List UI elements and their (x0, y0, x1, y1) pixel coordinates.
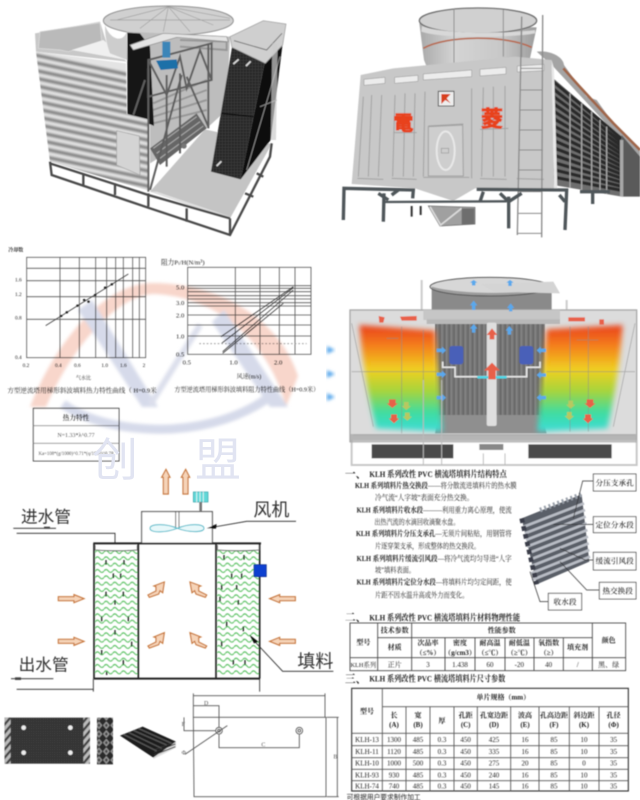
data row: -20 (515, 661, 524, 669)
data rows: 85 (551, 771, 558, 779)
data line (46, 274, 128, 326)
data rows: 485 (413, 748, 424, 756)
fill frame lines (352, 323, 635, 435)
brand character 電: 電 (393, 113, 413, 135)
data rows: 0.3 (438, 748, 447, 756)
data rows: 85 (551, 748, 558, 756)
y axis labels: 0.5 (176, 351, 185, 358)
data rows: 35 (610, 771, 618, 779)
data rows: 425 (489, 736, 500, 744)
y axis labels: 3.0 (176, 300, 185, 307)
header cells: 孔径 (607, 711, 622, 720)
table: thermal characteristics: 热力特性 (63, 413, 90, 422)
brand character 菱: 菱 (481, 107, 503, 132)
data rows: 0.3 (438, 771, 447, 779)
dimension letters (182, 701, 337, 760)
label: 缓流引风段: 缓流引风段 (596, 556, 634, 566)
data rows: 16 (522, 736, 529, 744)
label: 进水管: 进水管 (21, 508, 71, 527)
data rows: 450 (460, 771, 471, 779)
label: 出水管: 出水管 (19, 656, 69, 675)
section three heading (345, 673, 506, 685)
orange air arrows (58, 469, 295, 648)
dimension letters: B (333, 754, 337, 760)
y axis labels: 5.0 (176, 285, 185, 292)
x axis labels (183, 359, 283, 366)
x axis labels: 1.6 (120, 363, 127, 369)
header cells: 氧指数 (538, 638, 559, 647)
data rows: 16 (522, 748, 529, 756)
data rows: 500 (413, 760, 424, 768)
data row: 3 (426, 661, 430, 669)
back stacks (537, 51, 640, 160)
photo: fill sheet front (5, 718, 90, 764)
chart: resistance characteristic curve (161, 257, 319, 394)
feature list: 坡”填料表面。 (375, 565, 415, 575)
data rows: 485 (413, 736, 424, 744)
ladder (517, 15, 543, 237)
data rows: 10 (581, 748, 588, 756)
data rows: 450 (460, 736, 471, 744)
data rows: 450 (460, 748, 471, 756)
label: 出水管 (11, 656, 93, 689)
feature list: KLH 系列填料片定位分水段—将填料片均匀定间距，使 (357, 577, 512, 588)
data rows: 450 (460, 760, 471, 768)
data rows: 1300 (387, 736, 401, 744)
dimension letters: F (182, 722, 186, 728)
feature list: 出热汽流的水滴回收滴聚水盘。 (374, 516, 459, 526)
caption: 方型逆流塔用梯形斜波填料热力特性曲线（ H=0.9米 (7, 385, 157, 394)
label: 缓流引风段 (593, 552, 636, 570)
data rows: 485 (413, 771, 424, 779)
y axis labels: 1.0 (176, 334, 185, 341)
watermark: logo arcs (30, 283, 298, 429)
dimension drawing (182, 693, 339, 797)
feature list: 片距不因水温升高或外力而变化。 (375, 590, 468, 600)
data rows: KLH-11 (355, 748, 379, 756)
corrugated side wall (36, 52, 148, 190)
feature list: KLH 系列填料片缓流引风段—将冷气流均匀导进“人字 (357, 553, 512, 563)
data rows: 335 (489, 748, 500, 756)
water tanks and piping (443, 346, 540, 377)
front wall (352, 57, 557, 201)
header cells: （≥） (540, 649, 558, 657)
axis title: 冷却数 (8, 247, 23, 254)
data rows: 20 (522, 760, 529, 768)
hot to cold fill right (537, 325, 623, 432)
data row: KLH系列 (350, 660, 376, 669)
header cells: 次品率 (418, 638, 439, 647)
blue flow pointers (327, 346, 335, 401)
chart: thermal characteristic curve (7, 247, 157, 394)
header cells: （≤℃） (478, 649, 502, 657)
door panel (428, 125, 463, 176)
header cells: 长 (390, 711, 397, 720)
caption: 方型逆流塔用梯形斜波填料阻力特性曲线（H=0.9米） (174, 385, 319, 394)
tower housing (350, 277, 637, 465)
left fill block (95, 551, 138, 676)
roof and plenum (35, 22, 127, 62)
data rows: 85 (551, 783, 558, 791)
data rows: KLH-13 (355, 736, 379, 744)
label: 分压支承孔: 分压支承孔 (596, 477, 634, 487)
header cells: 颜色 (602, 635, 616, 644)
data row: 40 (545, 661, 553, 669)
data row: 正片 (388, 660, 402, 669)
central chamber (435, 320, 545, 420)
label: 定位分水段: 定位分水段 (596, 519, 634, 529)
data rows: 35 (610, 748, 618, 756)
photo: fill pack (120, 727, 176, 759)
hot to cold fill left (359, 325, 443, 432)
access door (117, 131, 140, 175)
section three heading: 三、 (345, 673, 366, 685)
header cells: 宽 (414, 711, 421, 720)
blue control box (254, 565, 266, 577)
data rows: 35 (610, 736, 618, 744)
header cells: 耐低温 (509, 638, 530, 647)
table: thermal characteristics (33, 408, 119, 461)
basin (350, 380, 637, 465)
base frame (50, 143, 272, 235)
header cells: 波高 (518, 711, 532, 720)
y axis labels (15, 278, 22, 361)
data rows: 16 (522, 783, 529, 791)
axis title: 阻力P₍/H(N/m³) (161, 257, 205, 266)
heading (345, 469, 507, 481)
data rows: 240 (489, 771, 500, 779)
y axis labels: 0.8 (15, 315, 22, 321)
data rows: 35 (610, 783, 618, 791)
data row (350, 660, 619, 669)
feature list (355, 480, 517, 600)
plot grid (27, 257, 146, 358)
header cells: (C) (461, 721, 471, 729)
header cells: (F) (550, 721, 559, 729)
image: crossflow cooling tower (343, 8, 640, 237)
header cells: (E) (520, 721, 530, 729)
data rows: 0.3 (438, 760, 447, 768)
resistance lines (221, 287, 293, 353)
y axis labels: 1.2 (15, 292, 22, 298)
header cells: (D) (489, 721, 500, 729)
data rows: 0 (582, 760, 586, 768)
data rows: 85 (551, 736, 558, 744)
x axis labels: 2 (143, 363, 146, 369)
label: 进水管 (13, 508, 115, 543)
sheet outline (193, 717, 326, 797)
dotted reference row (199, 342, 307, 345)
data rows: 740 (389, 783, 400, 791)
data rows: KLH-10 (355, 760, 379, 768)
section one: structure features (345, 469, 636, 624)
dimension letters: C (261, 743, 265, 749)
top right housing (230, 21, 286, 63)
watermark: character 盟: 盟 (195, 434, 241, 486)
fan ring top (103, 6, 233, 35)
y axis labels: 0.4 (15, 355, 22, 361)
header cells: 技术参数 (381, 625, 409, 634)
header cells: 耐高温 (480, 638, 500, 647)
x axis labels: 2.0 (274, 359, 283, 366)
header cells: 材质 (388, 643, 402, 652)
section two heading (345, 612, 521, 624)
x axis labels: 0.5 (183, 359, 192, 366)
data row: 黑、绿 (598, 660, 619, 669)
table: material physical properties (345, 623, 626, 685)
header cells: 厚 (438, 716, 445, 725)
central pipe (487, 323, 497, 426)
x axis title: 风速(m/s) (237, 372, 261, 380)
data row: / (577, 661, 579, 669)
section three heading: KLH 系列改性 PVC 横流塔填料片尺寸参数 (369, 674, 506, 684)
x axis labels: 0.2 (23, 363, 30, 369)
header cells: （≤%） (416, 649, 440, 657)
black fill packs (211, 43, 283, 179)
feature list: KLH 系列填料片收水段———利用重力离心原理，使流 (357, 505, 512, 516)
x axis labels: 0.4 (55, 363, 62, 369)
data rows: 930 (389, 771, 400, 779)
data rows: 145 (489, 783, 500, 791)
header cells: 孔宽边距 (480, 711, 508, 720)
x axis labels: 1.0 (229, 359, 238, 366)
table: thermal characteristics: N=1.33*λ^0.77 (57, 433, 95, 439)
hopper (428, 206, 475, 226)
data rows: 275 (489, 760, 500, 768)
feature list: 片逐穿架支承，形成整体的热交换段。 (375, 540, 480, 551)
x axis title: 气水比 (76, 375, 91, 382)
leader lines (530, 481, 599, 602)
feature list: 冷气流“人字坡”表面充分热交换。 (375, 492, 473, 502)
diagram: crossflow tower schematic (11, 469, 333, 692)
header cells: (K) (579, 721, 590, 729)
y axis labels (176, 285, 185, 358)
data rows (355, 736, 618, 791)
plot grid (188, 267, 311, 354)
data rows: 1120 (387, 748, 401, 756)
header cells (360, 693, 622, 729)
fan stack (419, 8, 537, 67)
side louvers (552, 77, 623, 198)
feature list: KLH 系列填料片热交换段——将分散流进填料片的热水膜 (355, 480, 517, 490)
data rows: KLH-93 (355, 771, 379, 779)
label: 分压支承孔 (593, 474, 636, 491)
section two heading: 二、 (345, 612, 366, 624)
label: 收水段 (548, 593, 582, 610)
data rows: 10 (581, 771, 588, 779)
interior rack (150, 113, 207, 165)
dark opening (127, 33, 154, 126)
bolt holes (216, 727, 303, 734)
dimension letters: D (204, 701, 209, 707)
dimension letters: Φ (182, 750, 187, 756)
label: 填料: 填料 (297, 651, 333, 671)
tower outline (93, 543, 261, 692)
watermark: character 创: 创 (92, 434, 138, 486)
y axis labels: 1.6 (15, 278, 22, 284)
x axis labels: 0.6 (74, 363, 81, 369)
data rows: 10 (581, 736, 588, 744)
label: 风机: 风机 (253, 500, 289, 520)
label: 热交换段: 热交换段 (602, 585, 633, 595)
section two heading: KLH 系列改性 PVC 横流塔填料片材料物理性能 (369, 612, 521, 622)
data rows: 35 (610, 760, 618, 768)
header cells: （≥℃） (507, 649, 532, 657)
right fill block (217, 551, 259, 676)
dimension lines (184, 693, 339, 797)
fan housing (142, 512, 212, 543)
label: 风机 (207, 500, 296, 529)
y axis labels: 2.0 (176, 313, 185, 320)
x axis labels: 1.0 (101, 363, 108, 369)
heading: 一、 (345, 470, 366, 481)
header cells: 性能参数 (488, 625, 516, 634)
label: 填料 (249, 635, 333, 671)
header cells: 型号 (360, 706, 374, 715)
data rows: 85 (551, 760, 558, 768)
image: thermal flow cutaway (350, 277, 637, 465)
data rows: 16 (522, 771, 529, 779)
data rows: 0.3 (438, 783, 447, 791)
steel truss (133, 43, 212, 192)
header cells: 斜边距 (574, 711, 594, 720)
header cells: 型号 (356, 637, 370, 646)
header cells: (A) (389, 721, 400, 729)
fill module drawing (522, 494, 590, 584)
red flow arrows (379, 316, 604, 423)
header cells: （g/cm3） (444, 649, 476, 657)
heading: KLH 系列改性 PVC 横流塔填料片结构特点 (369, 469, 507, 479)
data rows: 1000 (387, 760, 401, 768)
feature list: KLH 系列填料片分压支承孔—无须片间粘贴，用钢管将 (356, 528, 512, 539)
table: thermal characteristics: Ka=108*(g/1000)^0.71*(q/1000)^0.78 (38, 450, 114, 457)
image: cutaway cooling tower (33, 6, 286, 235)
data row: 60 (487, 661, 494, 669)
header cells: 密度 (453, 638, 467, 647)
header cells: 填充剂 (567, 643, 588, 652)
label: 定位分水段 (593, 517, 636, 533)
motor icon (193, 492, 208, 511)
blue motor (156, 42, 178, 70)
floor (150, 129, 272, 218)
data rows: 485 (413, 783, 424, 791)
header cells: 单片规格（mm） (477, 693, 530, 702)
data rows: 0.3 (438, 736, 447, 744)
header cells: (Φ) (608, 721, 620, 729)
header cells: 孔高边距 (540, 711, 568, 720)
x axis labels (23, 363, 146, 369)
rear interior wall (127, 32, 230, 163)
faded green arrows (402, 401, 575, 421)
label: 收水段: 收水段 (554, 596, 577, 606)
logo badge (438, 91, 454, 106)
data rows: 10 (581, 783, 588, 791)
data row: 1.438 (452, 661, 468, 669)
data rows: KLH-74 (355, 783, 379, 791)
data rows: 450 (460, 783, 471, 791)
fan blade (130, 33, 228, 50)
steel legs (343, 188, 610, 230)
header cells (356, 625, 616, 657)
header cells: 孔距 (459, 711, 473, 720)
blue air arrows (437, 280, 546, 401)
table: fill sheet dimensions (347, 688, 628, 800)
photo: fill sheet side (97, 718, 113, 764)
header cells: (B) (413, 721, 423, 729)
label: 热交换段 (599, 582, 636, 599)
